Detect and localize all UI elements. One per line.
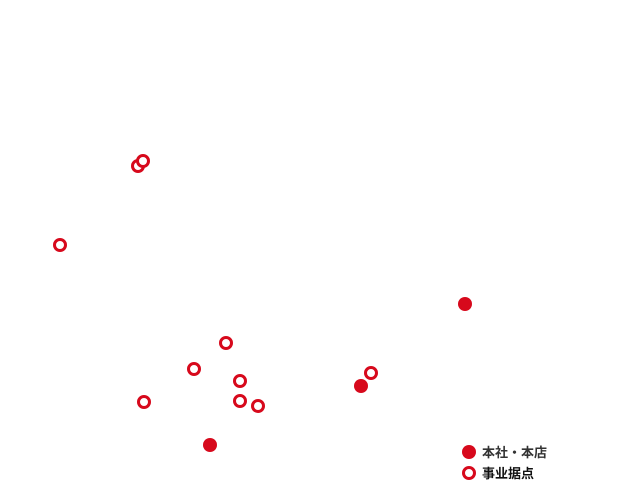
office marker 2 <box>138 156 148 166</box>
legend icon: business location <box>464 468 474 478</box>
legend label: business location: 事业据点 <box>482 466 534 481</box>
office marker 10 <box>366 368 376 378</box>
office marker 3 <box>54 240 66 250</box>
legend label: head office: 本社・本店 <box>482 445 547 460</box>
map markers <box>54 156 472 452</box>
office marker 6 <box>234 376 246 386</box>
head office marker 2 <box>354 379 368 393</box>
office marker 5 <box>188 364 200 374</box>
office marker 4 <box>220 338 232 348</box>
office marker 9 <box>138 396 150 408</box>
head office marker 3 <box>203 438 217 452</box>
office marker 8 <box>252 400 264 412</box>
legend icon: head office <box>462 445 476 459</box>
office marker 1 <box>132 160 144 172</box>
head office marker 1 <box>458 297 472 311</box>
office marker 7 <box>234 396 246 406</box>
legend <box>462 445 547 481</box>
